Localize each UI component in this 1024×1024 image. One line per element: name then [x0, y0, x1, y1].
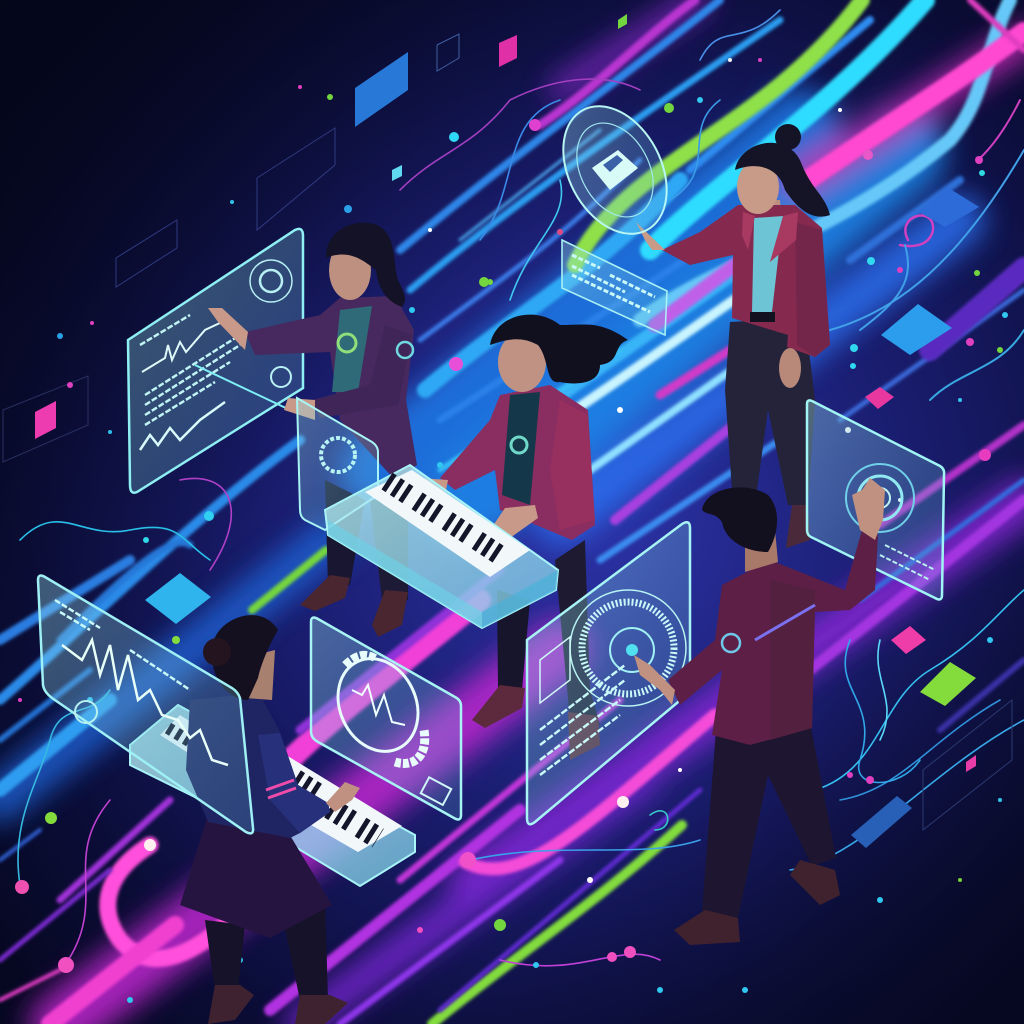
keyboard body — [130, 705, 415, 886]
shirt — [752, 216, 783, 312]
hand — [326, 782, 360, 812]
panel: small hologram by keyboard — [297, 398, 378, 530]
neck and face — [246, 650, 275, 700]
jacket — [440, 385, 595, 540]
skirt — [180, 815, 332, 938]
hair bun — [203, 638, 231, 666]
keyboard body — [325, 465, 558, 628]
neck — [745, 530, 778, 572]
raised hand — [852, 478, 885, 540]
hand — [490, 505, 538, 538]
shoes — [300, 575, 350, 611]
legs — [725, 318, 815, 505]
flowing light streaks: green — [252, 0, 862, 1024]
jacket — [186, 695, 330, 838]
panel: waveform hologram (lower-left) — [38, 576, 253, 833]
jacket shading — [795, 222, 830, 357]
panel: large hologram with waveform (left) — [128, 229, 303, 493]
person: top-right musician — [636, 124, 830, 548]
lapels — [742, 212, 798, 262]
keyboard: lower-left — [130, 705, 415, 886]
shoes — [472, 685, 525, 728]
arm — [312, 325, 412, 418]
shirt — [332, 306, 372, 392]
legs — [325, 480, 365, 585]
legs — [497, 590, 530, 690]
person: top-left musician — [208, 223, 417, 637]
shoes — [674, 910, 740, 945]
pointing hand — [634, 655, 675, 705]
legs — [205, 920, 245, 990]
keyboard black keys under glass — [168, 728, 228, 765]
hair — [490, 315, 628, 383]
keyboard black keys far end — [330, 808, 378, 838]
jacket — [662, 205, 830, 357]
sleeve badge — [722, 634, 740, 652]
lowered hand — [779, 348, 801, 388]
belt — [750, 312, 775, 322]
legs — [702, 712, 836, 918]
hand — [408, 478, 448, 510]
person: lower-right musician — [634, 478, 885, 945]
panel: round hologram badge — [542, 88, 688, 252]
shoe — [786, 505, 810, 548]
panel: ring waveform hologram — [311, 618, 461, 819]
keyboard white keys — [365, 470, 530, 577]
shoes — [208, 985, 254, 1024]
keyboard black keys near player — [296, 778, 318, 792]
sleeve badge — [397, 342, 413, 358]
panel: gauge hologram — [527, 522, 690, 824]
hand — [208, 308, 248, 350]
hair bun — [775, 124, 801, 150]
keyboard: centre — [325, 465, 558, 628]
shirt emblem — [511, 437, 527, 453]
person: lower-left musician — [180, 615, 360, 1024]
sleeve stripes — [266, 780, 296, 798]
pointing hand — [636, 222, 665, 250]
jacket — [245, 296, 417, 480]
sleeve light streak — [755, 605, 815, 640]
neck — [750, 200, 782, 224]
shirt — [502, 392, 540, 505]
hair — [326, 223, 405, 307]
hair — [702, 487, 777, 552]
shirt emblem — [338, 334, 356, 352]
panel: right hologram — [807, 400, 944, 599]
keyboard black keys — [387, 481, 507, 560]
panel: small hologram readout — [562, 240, 667, 335]
sleeve — [258, 733, 330, 833]
hair — [735, 143, 830, 217]
face — [737, 160, 779, 214]
jacket — [668, 530, 878, 745]
face — [329, 240, 371, 300]
face — [498, 332, 546, 392]
keyboard white keys — [285, 755, 402, 852]
hair — [212, 615, 278, 700]
hand — [284, 398, 315, 420]
person: centre musician — [408, 315, 628, 760]
